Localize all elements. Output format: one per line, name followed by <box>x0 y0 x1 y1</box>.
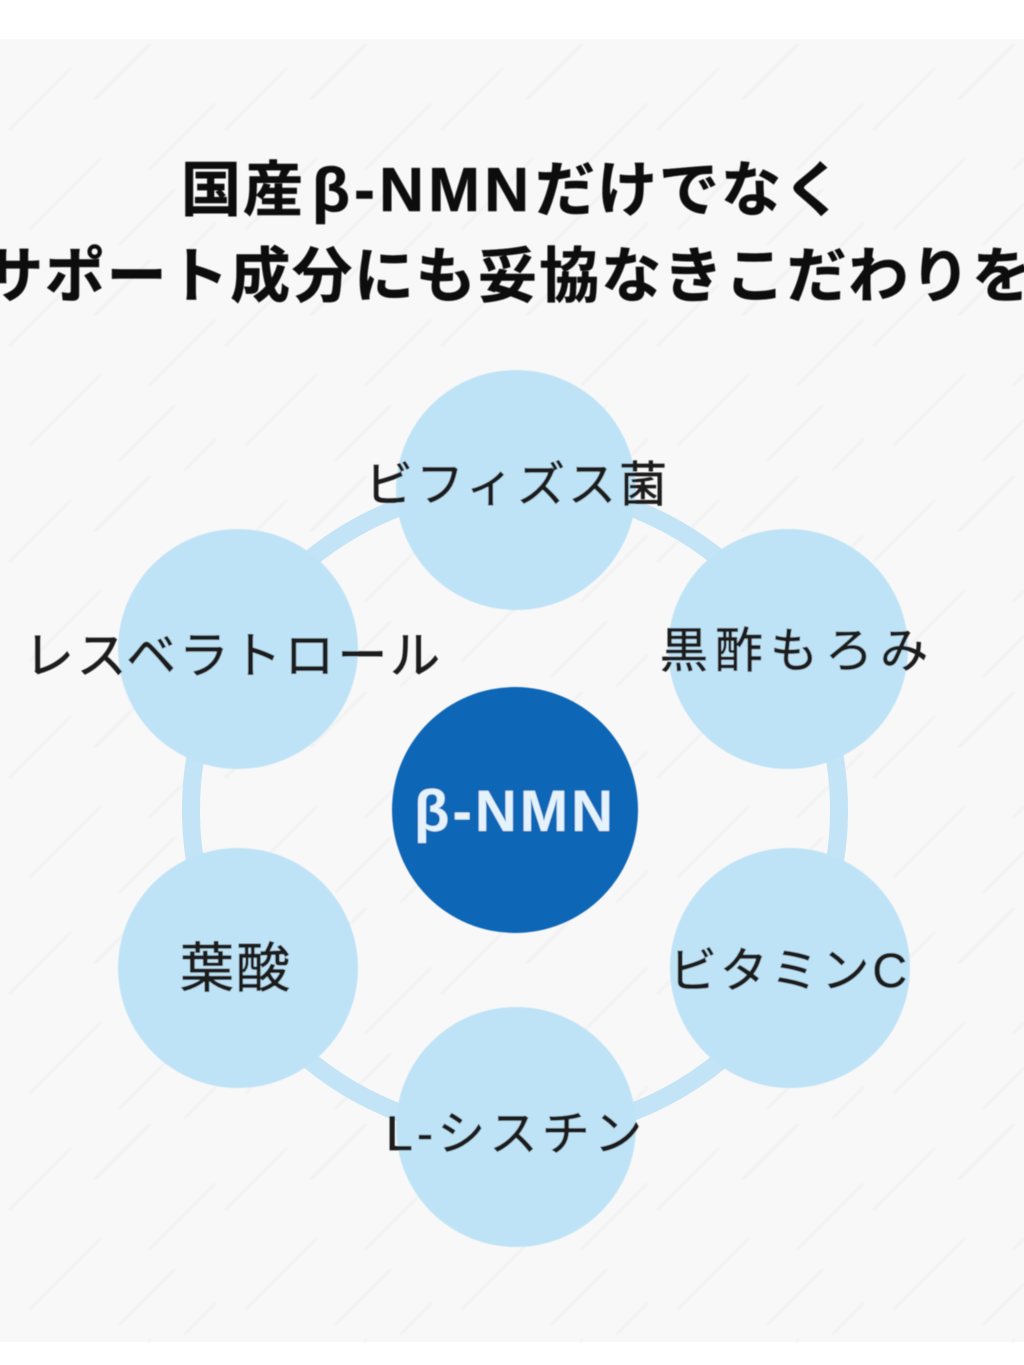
ingredient: ビタミンC <box>669 848 910 1088</box>
ingredient: 葉酸: 葉酸 <box>180 939 290 999</box>
title: β-NMN <box>312 156 529 225</box>
ingredient: ビタミンC: ビタミンC <box>669 945 907 998</box>
ingredient: 葉酸 <box>118 848 358 1088</box>
center: β-NMN <box>392 687 638 933</box>
connecting ring <box>191 486 839 1134</box>
title: だけでなく <box>535 157 843 224</box>
ingredient: L-シスチン <box>386 1007 642 1247</box>
title: 国産 <box>181 157 303 224</box>
ingredient: レスベラトロール: レスベラトロール <box>24 628 440 684</box>
ingredient: L-シスチン: L-シスチン <box>386 1108 642 1161</box>
ingredient: レスベラトロール <box>24 529 440 769</box>
center: β-NMN: β-NMN <box>414 779 613 844</box>
title <box>0 156 1024 310</box>
ingredient: 黒酢もろみ <box>660 529 928 769</box>
title: サポート成分にも妥協なきこだわりを <box>0 243 1024 310</box>
ingredient: ビフィズス菌 <box>365 370 667 610</box>
ingredient: 黒酢もろみ: 黒酢もろみ <box>660 625 928 678</box>
ingredient: ビフィズス菌: ビフィズス菌 <box>365 459 667 512</box>
